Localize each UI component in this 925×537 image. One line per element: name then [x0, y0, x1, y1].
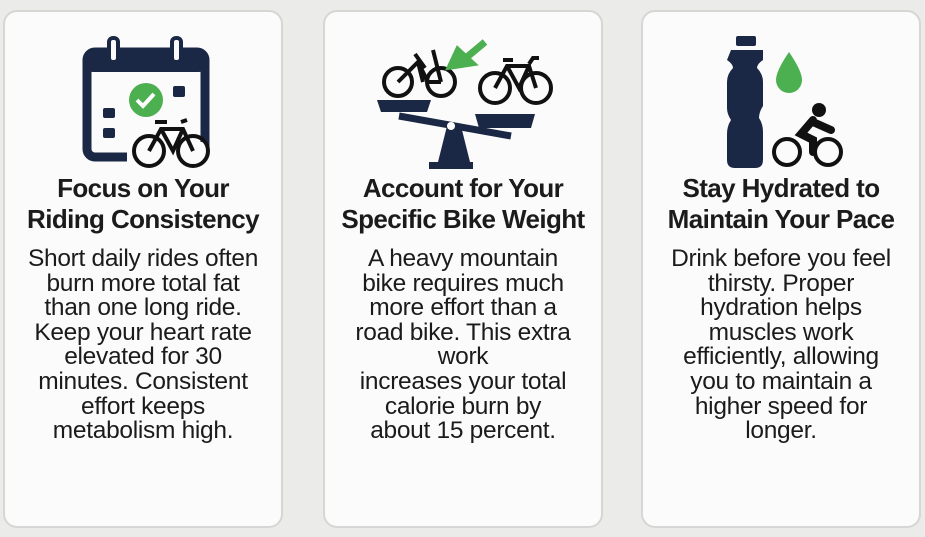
heading [341, 173, 585, 234]
text block: hydration helps [700, 294, 862, 321]
text block: Keep your heart rate [34, 319, 252, 346]
text block: higher speed for [695, 393, 867, 420]
text block: Short daily rides often [28, 245, 258, 272]
text block: longer. [745, 417, 817, 444]
text block: about 15 percent. [370, 417, 556, 444]
text block: metabolism high. [53, 417, 233, 444]
text block: road bike. This extra [355, 319, 571, 346]
text block: burn more total fat [46, 270, 240, 297]
heading: Specific Bike Weight [341, 204, 585, 234]
text block [28, 245, 258, 444]
heading: Riding Consistency [27, 204, 259, 234]
text block: thirsty. Proper [708, 270, 854, 297]
text block: muscles work [709, 319, 853, 346]
text block: Drink before you feel [671, 245, 891, 272]
text block: minutes. Consistent [38, 368, 248, 395]
text block: efficiently, allowing [683, 343, 879, 370]
heading [27, 173, 260, 234]
text block: bike requires much [362, 270, 564, 297]
icon: calendar with bike [82, 36, 210, 168]
text block: than one long ride. [44, 294, 242, 321]
heading: Account for Your [363, 173, 563, 203]
icon: bottle, drop, cyclist [727, 36, 843, 168]
text block: effort keeps [81, 393, 205, 420]
text block: elevated for 30 [64, 343, 222, 370]
panel: bike weight [323, 10, 603, 528]
text block [671, 245, 891, 444]
heading [668, 173, 894, 234]
text block: you to maintain a [690, 368, 872, 395]
heading: Stay Hydrated to [682, 173, 880, 203]
icon: scale with bikes [377, 39, 553, 169]
text block [355, 245, 571, 444]
text block: A heavy mountain [368, 245, 558, 272]
panel: hydration [641, 10, 921, 528]
text block: calorie burn by [385, 393, 541, 420]
text block: increases your total [360, 368, 566, 395]
panel: consistency [3, 10, 283, 528]
text block: work [438, 343, 488, 370]
heading: Focus on Your [57, 173, 229, 203]
text block: more effort than a [369, 294, 557, 321]
heading: Maintain Your Pace [668, 204, 894, 234]
